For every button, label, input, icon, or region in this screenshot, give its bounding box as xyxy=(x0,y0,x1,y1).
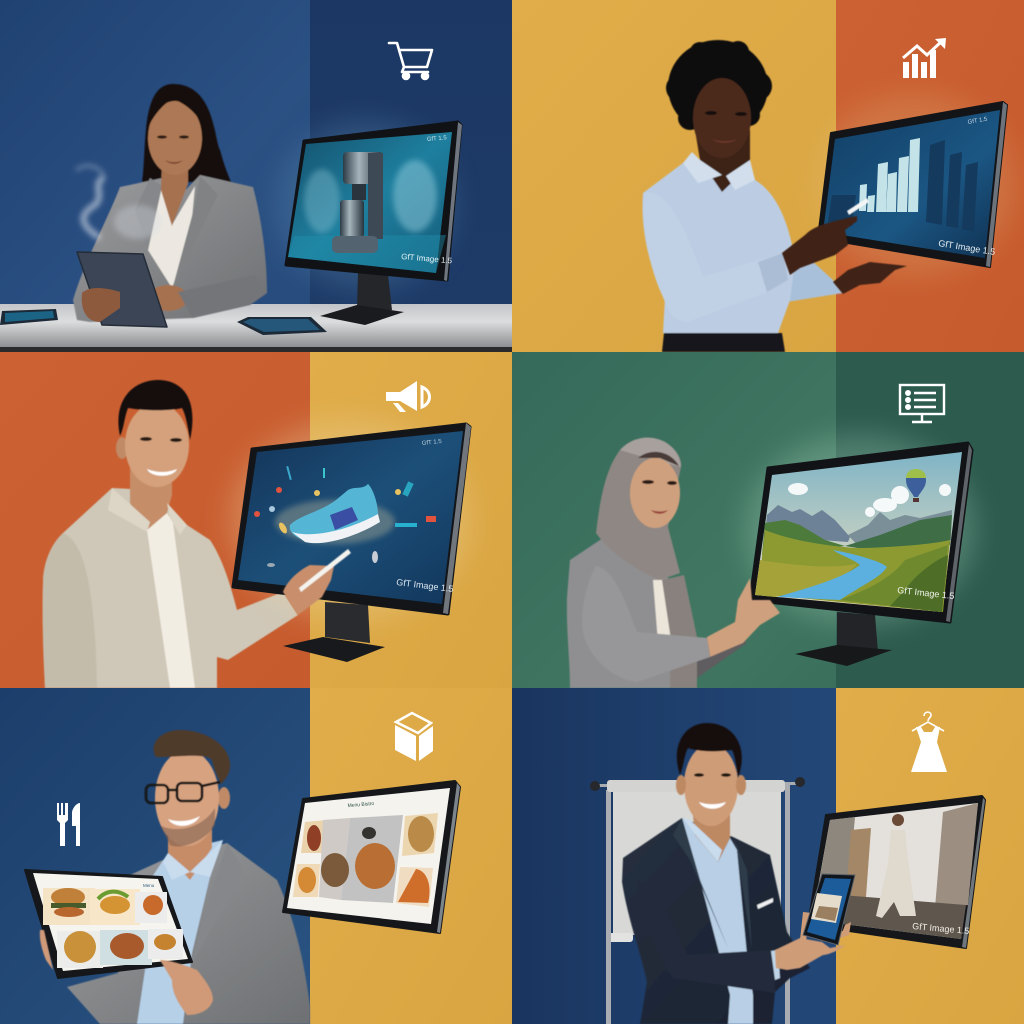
hands holding tablet xyxy=(40,930,213,1015)
tablet: food menu: Menu xyxy=(143,883,155,888)
icon: box xyxy=(395,713,433,761)
person: woman in hijab xyxy=(567,438,747,688)
icon: shopping cart xyxy=(389,43,432,79)
panel: fashion xyxy=(512,688,1024,1024)
sneaker xyxy=(290,484,380,543)
confetti xyxy=(254,466,436,567)
monitor: coffee machine xyxy=(275,120,462,325)
monitor: landscape xyxy=(745,435,975,666)
arm and hands holding monitor xyxy=(782,198,907,294)
table xyxy=(0,304,512,352)
monitor: business chart xyxy=(815,95,1015,275)
monitor: coffee machine: GfT Image 1.5 xyxy=(401,252,453,265)
monitor: sneaker xyxy=(230,420,471,662)
monitor: landscape: GfT Image 1.5 xyxy=(897,585,955,601)
handheld tablet xyxy=(77,252,167,327)
panel: analytics xyxy=(512,0,1024,352)
panel: shopping / product xyxy=(0,0,512,352)
small tablets on table xyxy=(0,309,327,335)
panel: presentation xyxy=(512,352,1024,688)
icon: presentation screen xyxy=(900,385,944,422)
icon: growth bar chart xyxy=(903,38,946,78)
hand on tablet xyxy=(82,288,120,322)
burger and dishes xyxy=(43,888,183,968)
flip chart xyxy=(590,777,805,1024)
bar chart on screen xyxy=(859,138,920,212)
food images xyxy=(293,813,438,907)
panel: food menu xyxy=(0,688,512,1024)
person: man with stylus xyxy=(43,380,298,688)
tablet: food display xyxy=(283,781,460,933)
hand with stylus xyxy=(283,549,351,615)
mountains and meadow xyxy=(755,505,952,612)
person: woman presenting chart xyxy=(642,40,843,352)
tablet: food menu xyxy=(25,870,192,978)
person: man with glasses xyxy=(67,730,310,1024)
monitor: sneaker: GfT 1.5 xyxy=(422,439,443,447)
tablet: food display: Menu Bistro xyxy=(347,801,375,809)
monitor: coffee machine: GfT 1.5 xyxy=(427,135,448,143)
icon: dress on hanger xyxy=(911,712,947,772)
steam xyxy=(76,166,162,239)
monitor: fashion photo xyxy=(808,796,985,948)
model in dress xyxy=(876,814,916,918)
monitor: sneaker: GfT Image 1.5 xyxy=(396,577,454,594)
coffee machine xyxy=(332,152,383,253)
hand holding monitor xyxy=(707,578,780,657)
hot air balloon xyxy=(906,469,926,502)
icon: fork and knife xyxy=(57,803,80,846)
monitor: fashion photo: GfT Image 1.5 xyxy=(912,921,970,936)
phone and hand xyxy=(775,874,855,970)
person: woman with tablet xyxy=(73,84,267,322)
monitor: business chart: GfT 1.5 xyxy=(967,116,989,126)
monitor: business chart: GfT Image 1.5 xyxy=(938,238,996,257)
icon: megaphone xyxy=(386,381,430,412)
person: man in navy blazer xyxy=(622,723,810,1024)
panel: marketing xyxy=(0,352,512,688)
